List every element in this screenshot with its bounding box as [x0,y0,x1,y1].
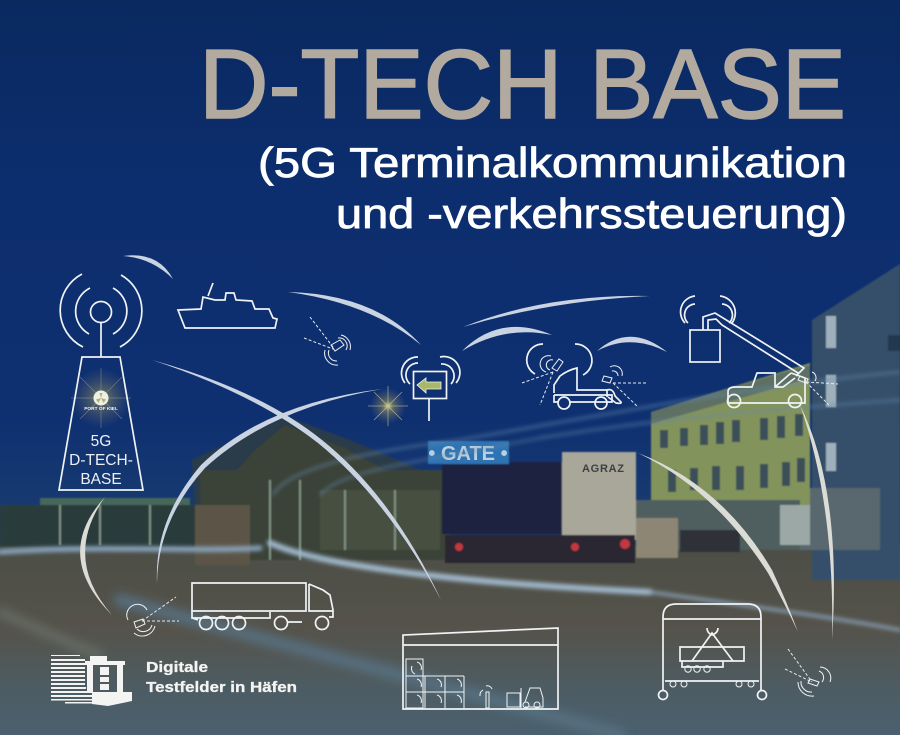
icon: terminal tug with sensors [522,344,647,409]
title: D-TECH BASE [199,29,846,139]
icon: ship [178,283,277,328]
light trails [0,372,900,630]
tower lamp glow [71,368,131,428]
port logo: PORT OF KIEL [84,406,118,412]
green lit building [636,363,810,550]
gate canopy [0,416,510,565]
icon: ground sensor [127,597,179,636]
port logo [84,390,118,412]
icon: lorry [192,583,333,630]
tower label: D-TECH- [69,452,133,469]
tower label [69,433,133,488]
logo text: Testfelder in Häfen [146,680,297,696]
subtitle: (5G Terminalkommunikation [258,139,847,186]
tower label: 5G [91,433,111,450]
street lamp glow [368,386,408,426]
logo mark [51,655,132,706]
gate sign text: • GATE • [428,443,508,465]
icon: digital gate sign [401,357,460,421]
slate office building [790,264,900,580]
icon: crane sensor [785,649,831,696]
icon: gantry crane with container [658,604,766,700]
trailer lettering: AGRAZ [582,463,624,475]
subtitle [258,139,847,237]
logo: Digitale Testfelder in Häfen [51,655,297,706]
icon: 5G tower [59,274,143,490]
logo text: Digitale [146,660,208,676]
icon: reach stacker with container [681,296,838,408]
logo text [146,660,297,696]
truck [442,452,740,563]
ground reflections [0,600,620,735]
connection arcs [80,255,834,640]
icon: warehouse with forklift [403,628,558,709]
subtitle: und -verkehrssteuerung) [336,190,847,237]
tower label: BASE [80,471,122,488]
gate sign [428,441,509,464]
icon: ship sensor [304,317,350,365]
